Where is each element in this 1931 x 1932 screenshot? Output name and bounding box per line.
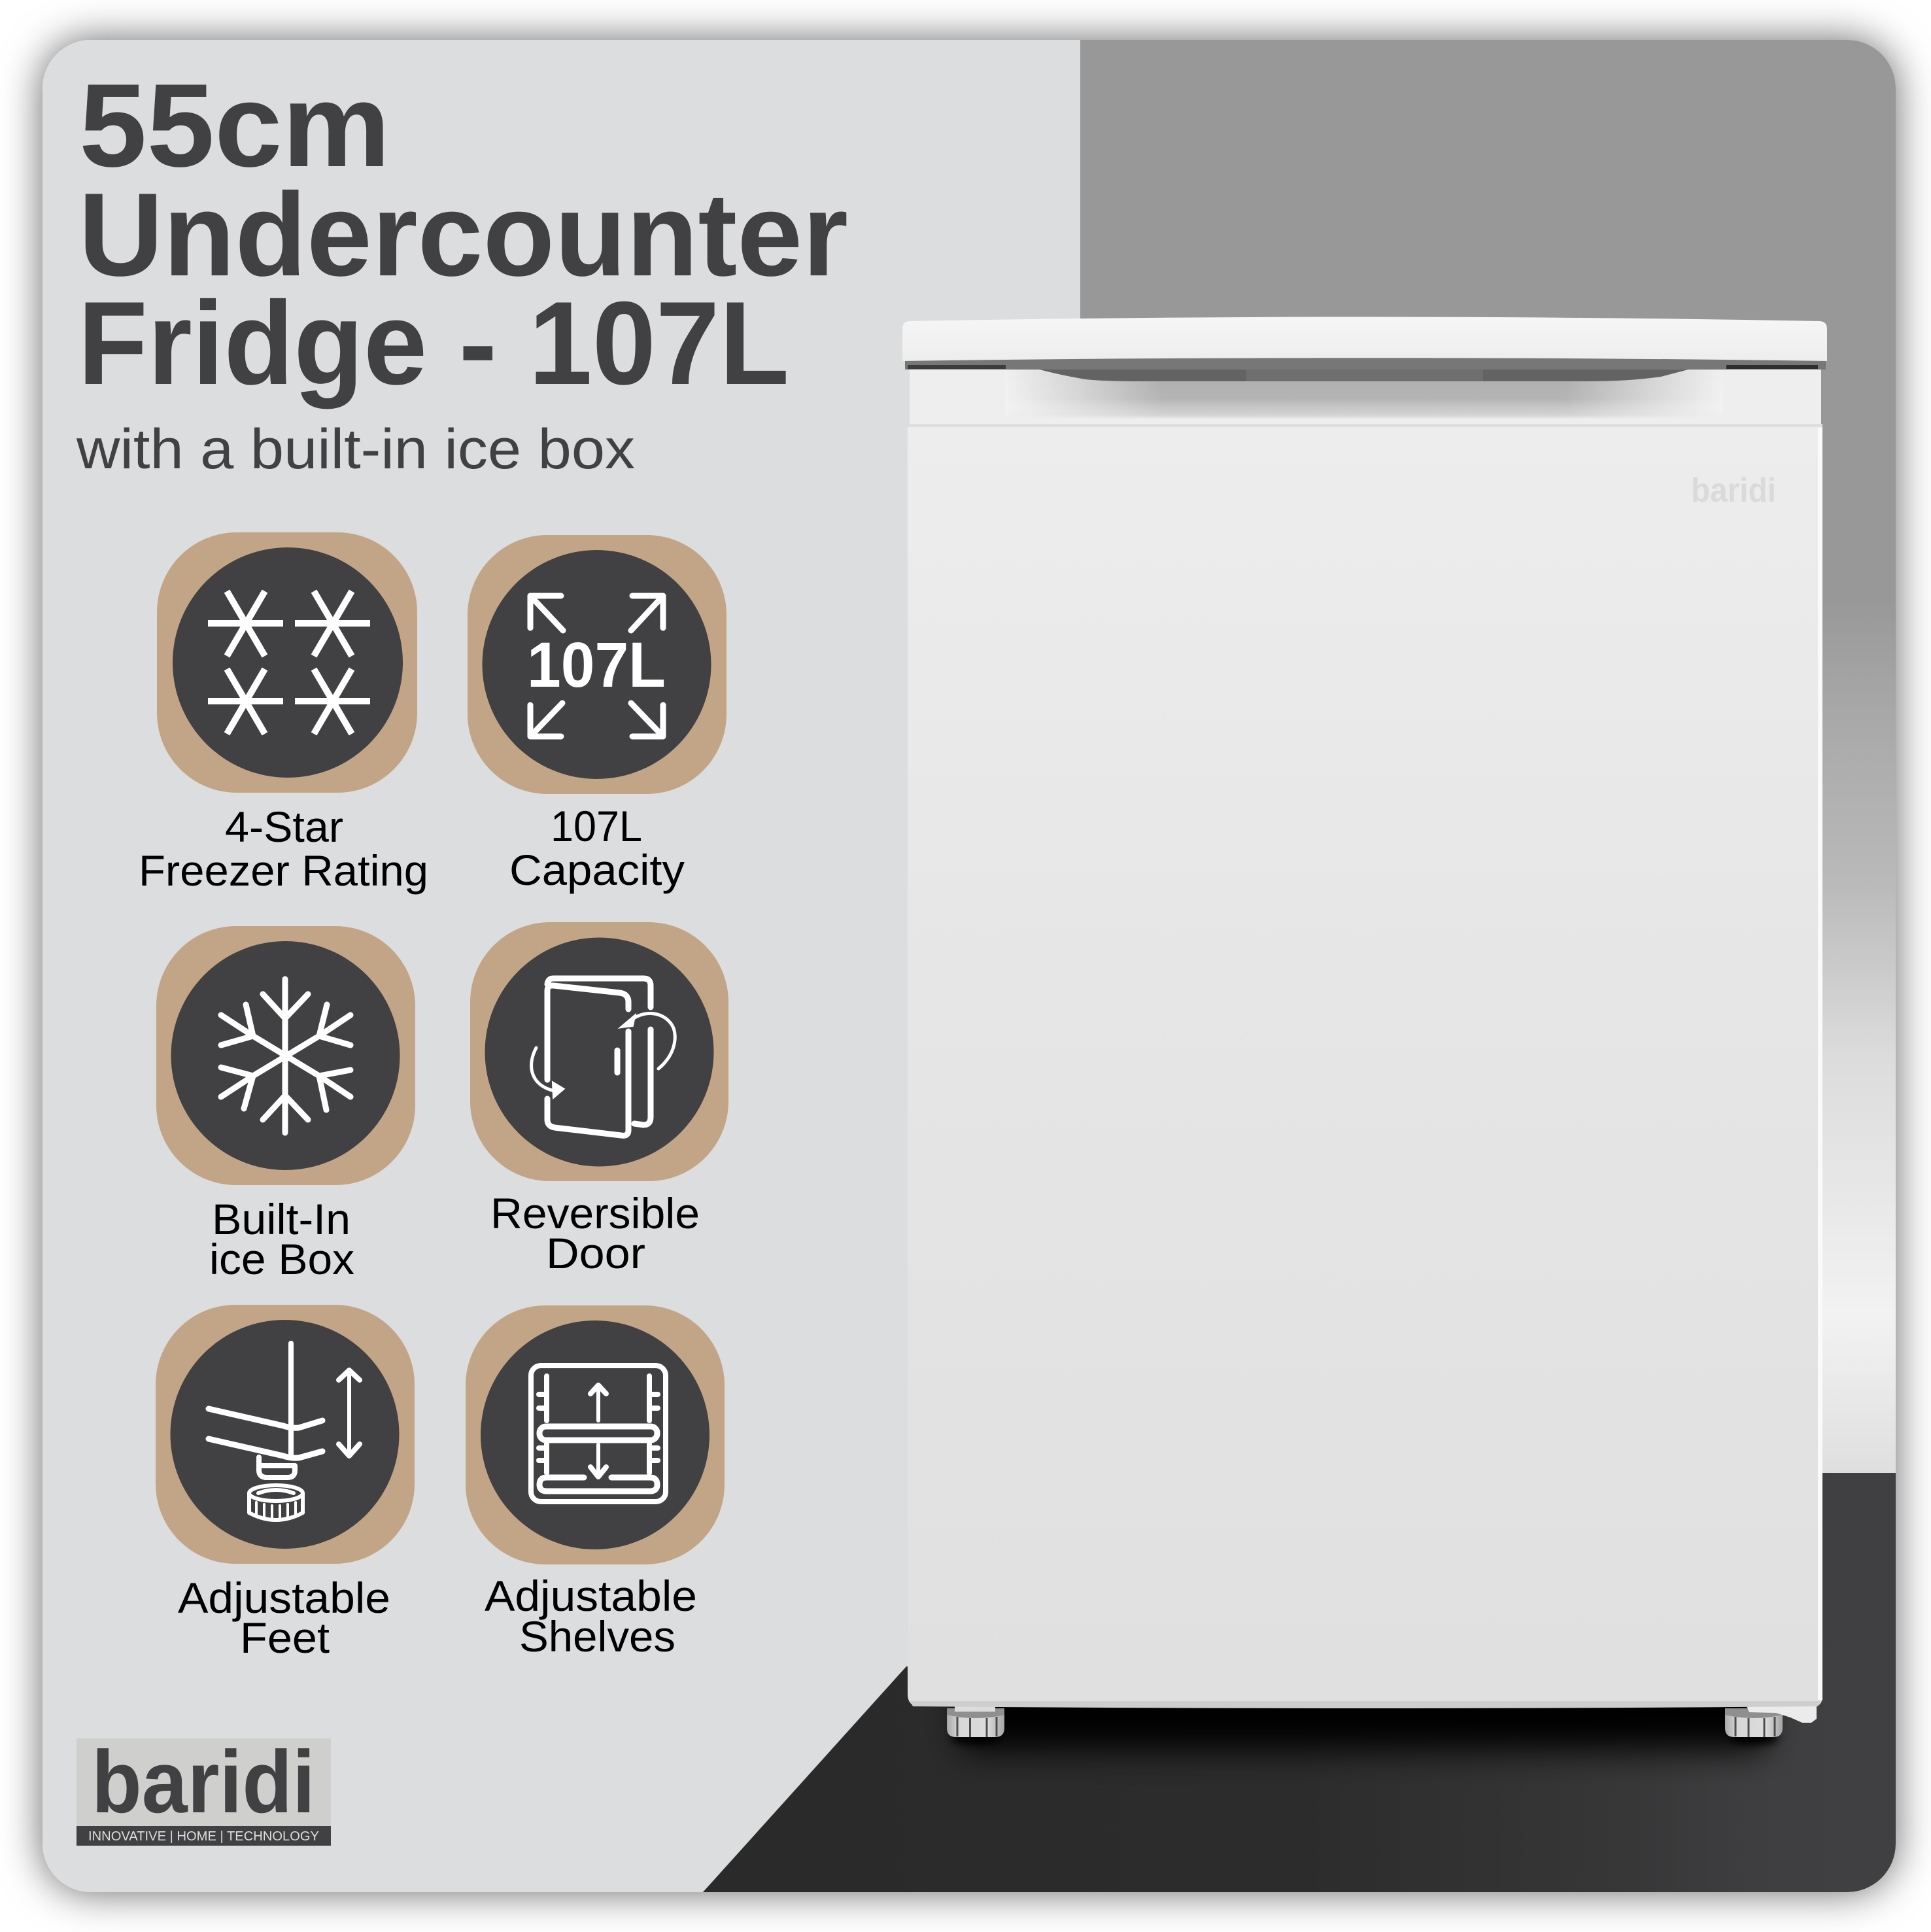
icon: shelf arrows [590,1385,606,1477]
logo: baridi [77,1733,331,1846]
feature: 107L capacity [468,535,726,894]
logo wordmark: baridi [92,1733,315,1831]
fridge hinge latch [1746,1704,1817,1723]
icon background [156,1305,415,1564]
label: 4-Star [225,802,343,851]
label: 107L [551,802,642,850]
label: Capacity [509,846,685,894]
fridge door [908,426,1822,1707]
background: dark floor [703,1473,1896,1892]
fridge lid [902,317,1827,361]
label: ice Box [209,1235,354,1283]
product: fridge [902,317,1827,1744]
icon: door [547,978,651,1135]
fridge handle recess [1005,361,1723,419]
feature: adjustable feet [156,1305,415,1662]
label: Built-In [212,1195,350,1243]
feature: reversible door [470,922,728,1277]
door edge highlight [1818,428,1822,1700]
door bottom edge [910,1701,1820,1708]
icon: four stars [208,591,370,734]
logo background [77,1738,331,1826]
feature: adjustable shelves [466,1305,725,1661]
icon background [470,922,728,1181]
fridge lid underside [905,358,1826,370]
icon background [157,532,417,793]
icon disc [170,1320,399,1549]
label [509,802,685,894]
door top edge [908,424,1822,427]
label: Freezer Rating [139,846,428,895]
label [485,1572,697,1661]
icon disc [171,941,400,1170]
icon disc [485,938,714,1167]
label: Door [546,1229,645,1277]
icon: shelves [531,1366,666,1502]
label [490,1189,700,1277]
feature: built-in ice box [156,926,415,1283]
icon background [468,535,726,794]
fridge body band [910,360,1821,428]
icon: rotation arrows [532,1014,675,1097]
label: Feet [240,1613,330,1662]
title: Fridge - 107L [78,277,789,409]
title [78,60,848,409]
label: Reversible [490,1189,700,1237]
fridge foot left [947,1706,1004,1744]
logo tagline: INNOVATIVE | HOME | TECHNOLOGY [88,1829,319,1844]
icon: 107L text: 107L [527,629,666,700]
icon: expanding arrows [530,596,663,736]
label [139,802,428,895]
subtitle: with a built-in ice box [76,418,635,481]
icon disc [481,1320,709,1549]
icon: height arrow [339,1370,360,1456]
icon background [466,1305,725,1564]
logo tagline bar [77,1826,331,1846]
icon: snowflake [221,979,350,1133]
icon: foot [209,1343,322,1520]
label: Adjustable [178,1574,390,1622]
title: 55cm [79,60,390,192]
icon disc [483,550,711,779]
background: grey wall [1080,40,1896,1474]
label: Shelves [519,1612,675,1661]
feature: 4-star freezer rating [139,532,428,895]
icon background [156,926,415,1185]
icon disc [173,547,403,778]
label: Adjustable [485,1572,697,1620]
door logo: baridi [1691,472,1776,509]
label [178,1574,390,1662]
label [209,1195,354,1283]
fridge foot right [1725,1708,1783,1744]
background: light left panel [43,40,1080,1892]
title: Undercounter [78,169,848,301]
floor shadow under fridge [947,1707,1784,1768]
